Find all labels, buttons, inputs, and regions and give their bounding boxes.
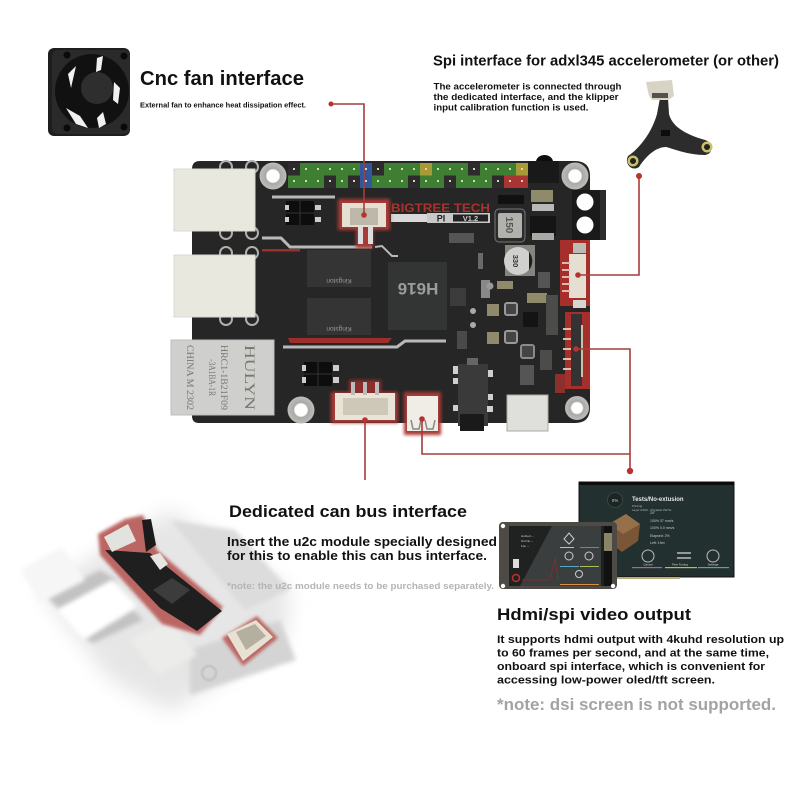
cpu H616	[388, 262, 447, 330]
text: spi description: the dedicated interface, and the klipper	[434, 92, 619, 102]
red accent strips	[262, 249, 392, 343]
ethernet port: HULYN	[241, 345, 257, 411]
screen: large hdmi display: Left: 1hm	[650, 541, 665, 545]
text: spi description: The accelerometer is connected through	[434, 82, 622, 92]
u2c module glow	[98, 515, 223, 635]
fpc slot highlight	[563, 312, 590, 389]
usb port top	[174, 169, 255, 231]
memory chip top: Kingston	[326, 277, 352, 284]
audio jack	[453, 358, 493, 431]
heading: dedicated can bus interface: Dedicated can bus interface	[229, 502, 467, 521]
arrow: fan callout	[328, 102, 367, 218]
arrow: can callout	[362, 417, 368, 480]
screen: small spi display	[499, 522, 617, 589]
screen: large hdmi display: Layer 0/100 - Printable PETG	[632, 508, 672, 512]
faded board dark strips	[47, 520, 296, 695]
screen: large hdmi display: 100% 0.0 mm/s	[650, 526, 675, 530]
brand logo	[391, 201, 490, 224]
two-pin connector highlight	[404, 392, 441, 435]
ethernet port: CHINA M 2302	[184, 345, 194, 410]
usb-c port	[507, 395, 548, 431]
screen: small spi display: Fan --	[521, 544, 529, 548]
brand logo: PI	[437, 214, 445, 224]
icon: accelerometer board	[627, 80, 712, 169]
text: video description: to 60 frames per second, and at the same time,	[497, 648, 769, 660]
u2c pin post	[142, 519, 156, 552]
heading: spi interface: Spi interface for adxl345 accelerometer (or other)	[433, 54, 779, 70]
capacitor	[504, 245, 535, 276]
screen: small spi display: Nozzle --	[521, 539, 533, 543]
memory chip bottom: Kingston	[326, 325, 352, 332]
can connector enlarged	[222, 616, 278, 666]
u2c button	[150, 553, 168, 570]
text: video description: It supports hdmi output with 4kuhd resolution up	[497, 634, 784, 646]
screen: large hdmi display: Cancel	[643, 562, 653, 566]
text: video description	[497, 634, 784, 686]
faded board	[40, 510, 290, 712]
arrow: hdmi to video	[419, 416, 630, 454]
small power components	[449, 233, 558, 385]
note: u2c purchase: *note: the u2c module needs to be purchased separately.	[227, 581, 494, 591]
text: video description: onboard spi interface, which is convenient for	[497, 661, 766, 673]
decorative traces	[262, 197, 446, 347]
screen: large hdmi display	[579, 482, 734, 579]
capacitor: 330	[511, 255, 520, 267]
inductor	[495, 209, 525, 242]
mounting hole faded	[202, 666, 216, 680]
text: fan description: External fan to enhance heat dissipation effect.	[140, 100, 306, 110]
memory chip top	[307, 250, 371, 287]
screen: large hdmi display: Printing	[632, 504, 643, 508]
u2c pcb	[105, 550, 222, 631]
brand logo: BIGTREE TECH	[391, 201, 490, 215]
power header bottom	[302, 362, 339, 386]
memory chip bottom	[307, 298, 371, 335]
icon: cooling fan	[48, 48, 130, 136]
text: can description: for this to enable this can bus interface.	[227, 548, 487, 563]
ethernet port	[171, 340, 274, 415]
screen: small spi display: Hotbed --	[521, 534, 534, 538]
heading: cnc fan interface: Cnc fan interface	[140, 67, 304, 90]
ethernet port: HRC1-1B21F09	[218, 345, 228, 410]
arrow: fpc to video	[573, 346, 633, 474]
boot switch	[555, 374, 565, 393]
mounting holes	[260, 162, 589, 424]
text: spi description: input calibration function is used.	[434, 102, 588, 112]
text: can description: Insert the u2c module specially designed	[227, 534, 497, 549]
power button	[536, 155, 553, 161]
pin header	[288, 163, 528, 188]
screen: large hdmi display: 20°	[650, 511, 656, 515]
screen: large hdmi display: 100% 37 mm/s	[650, 519, 674, 523]
spi connector highlight	[560, 240, 590, 308]
screen: large hdmi display: 0%	[612, 498, 618, 503]
can connector highlight	[331, 380, 398, 423]
text: video description: accessing low-power oled/tft screen.	[497, 674, 715, 686]
screen: large hdmi display: Fine Tuning	[672, 562, 688, 566]
power header top	[285, 201, 321, 225]
inductor: 150	[503, 217, 514, 234]
note: dsi not supported: *note: dsi screen is not supported.	[497, 695, 776, 714]
screen: large hdmi display: Elapsed: 2%	[650, 534, 670, 538]
board: PI V1.2	[171, 155, 606, 435]
text: spi description	[434, 82, 622, 112]
brand logo: V1.2	[463, 214, 478, 223]
faded usb ports	[20, 547, 197, 675]
usb solder pads	[220, 161, 258, 325]
pcb base	[192, 161, 590, 423]
usb port bottom	[174, 255, 255, 317]
terminal block	[572, 190, 606, 240]
image: faded board with u2c module	[20, 510, 296, 712]
u2c mcu	[153, 578, 190, 604]
fan connector highlight	[338, 199, 390, 248]
arrow: spi callout	[575, 173, 642, 278]
screen: large hdmi display: Tests/No-extusion	[632, 497, 684, 503]
screen: large hdmi display: Settings	[708, 562, 719, 566]
u2c usb-c	[104, 524, 136, 552]
regulator	[498, 190, 556, 240]
text: can description	[227, 534, 497, 563]
cpu H616: H616	[398, 279, 438, 298]
heading: hdmi spi video output: Hdmi/spi video output	[497, 605, 691, 624]
ethernet port: -3A1BA-1R	[206, 359, 216, 397]
